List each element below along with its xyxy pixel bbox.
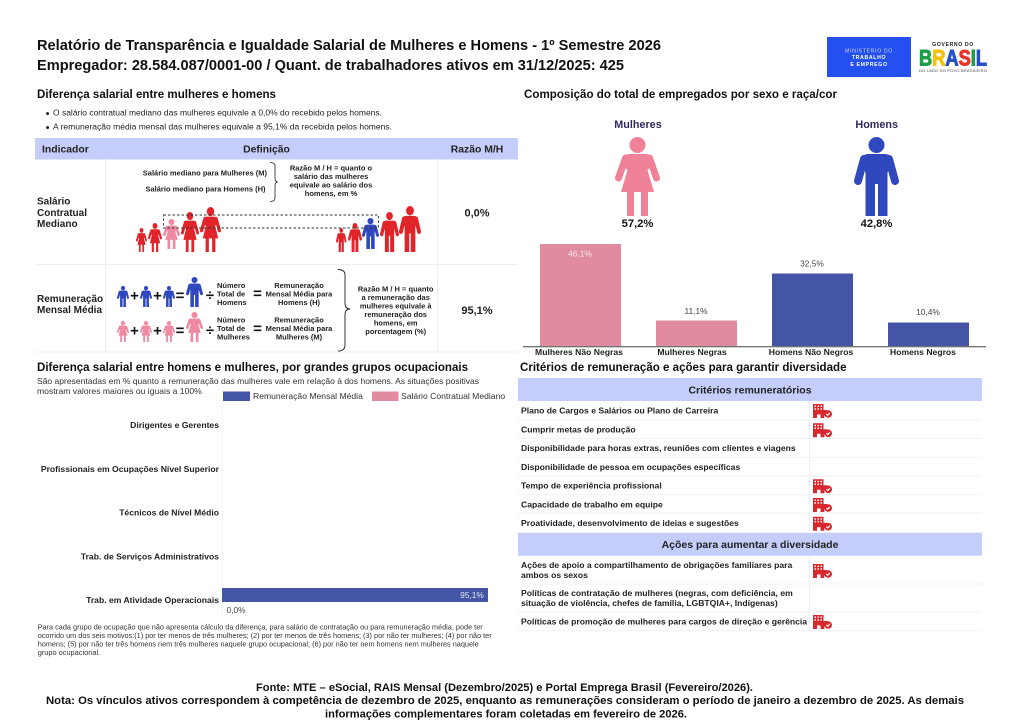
table header: Indicador bbox=[42, 144, 89, 156]
definition labels: salário das mulheres bbox=[294, 172, 368, 181]
heading: critérios: Critérios de remuneração e ações para garantir diversidade bbox=[520, 360, 847, 374]
ratio explanation: Razão M / H = quanto bbox=[358, 284, 434, 294]
icons: actions adopted bbox=[813, 564, 832, 629]
heading: composição: Composição do total de empregados por sexo e raça/cor bbox=[524, 87, 837, 101]
definition labels: Salário mediano para Homens (H) bbox=[145, 185, 266, 194]
action rows: Políticas de promoção de mulheres para cargos de direção e gerência bbox=[521, 616, 807, 626]
formula: women: Mulheres bbox=[217, 332, 250, 342]
indicator name: Mensal Média bbox=[37, 305, 102, 316]
formula: women: Número bbox=[217, 316, 246, 324]
formula: women: Remuneração bbox=[274, 316, 324, 324]
title: Relatório de Transparência e Igualdade Salarial de Mulheres e Homens - 1º Semestre 2026 bbox=[37, 38, 661, 54]
value: 95,1% bbox=[461, 305, 493, 317]
formula: men: + bbox=[130, 288, 139, 304]
legend: Salário Contratual Mediano bbox=[401, 391, 505, 401]
formula: women: Mulheres (M) bbox=[276, 332, 323, 342]
criteria rows: Tempo de experiência profissional bbox=[521, 480, 662, 490]
footer: source and note: informações complementares foram coletadas em fevereiro de 2026. bbox=[325, 708, 687, 720]
footnote bbox=[38, 622, 492, 657]
criteria rows: Plano de Cargos e Salários ou Plano de Carreira bbox=[521, 406, 718, 416]
formula: men bbox=[118, 277, 333, 307]
formula: women: = bbox=[253, 320, 262, 338]
median dashed box bbox=[164, 215, 378, 228]
ratio explanation: remuneração dos bbox=[364, 310, 427, 319]
formula: men: Homens (H) bbox=[278, 298, 321, 307]
icons: criteria adopted bbox=[813, 404, 832, 531]
icon: woman bbox=[618, 137, 656, 216]
formula: women: Mensal Média para bbox=[266, 324, 333, 333]
bullet list: A remuneração média mensal das mulheres equivale a 95,1% da recebida pelos homens. bbox=[53, 122, 392, 132]
formula: women: Total de bbox=[217, 324, 245, 333]
bullet list: ● bbox=[46, 124, 50, 132]
table header bbox=[35, 138, 518, 160]
bar chart: sexo e raça: Homens Negros bbox=[890, 347, 956, 357]
panel: men share: Homens bbox=[855, 119, 898, 131]
bar chart: grupos ocupacionais: 95,1% bbox=[460, 590, 484, 600]
ratio explanation: homens, em bbox=[374, 318, 418, 328]
bar chart: grupos ocupacionais: Técnicos de Nível Médio bbox=[119, 508, 219, 518]
action rows: ambos os sexos bbox=[521, 570, 588, 580]
bar chart: grupos ocupacionais bbox=[41, 407, 488, 616]
header: critérios remuneratórios: Critérios remuneratórios bbox=[688, 384, 812, 396]
panel: criteria table bbox=[518, 378, 982, 631]
criteria rows: Capacidade de trabalho em equipe bbox=[521, 500, 663, 510]
bar chart: sexo e raça: 10,4% bbox=[916, 307, 940, 317]
bar chart: grupos ocupacionais: 0,0% bbox=[226, 605, 246, 615]
formula: women: = bbox=[176, 322, 185, 340]
subtitle text: mostram valores maiores ou iguais a 100% bbox=[37, 386, 202, 396]
logo: Governo do Brasil: GOVERNO DO bbox=[932, 42, 974, 48]
row: salário contratual mediano bbox=[37, 162, 490, 252]
icons: men in order of salary bbox=[337, 206, 419, 252]
panel: women share bbox=[614, 119, 662, 230]
row: remuneração mensal média bbox=[37, 270, 493, 351]
bar chart: grupos ocupacionais: Profissionais em Ocupações Nível Superior bbox=[41, 464, 220, 474]
formula: men: = bbox=[253, 286, 262, 302]
definition labels: homens, em % bbox=[305, 189, 358, 198]
icon: man bbox=[858, 137, 895, 216]
header: ações bbox=[518, 533, 982, 556]
logo: Ministério do Trabalho e Emprego: E EMPREGO bbox=[850, 62, 888, 68]
indicator name: Contratual bbox=[37, 208, 87, 219]
footnote: Para cada grupo de ocupação que não apresenta cálculo da diferença, para salário de contratação ou para remuneração média, pode ter bbox=[38, 622, 483, 632]
formula: men: ÷ bbox=[206, 287, 214, 304]
criteria rows: Proatividade, desenvolvimento de ideias e sugestões bbox=[521, 518, 739, 528]
header: critérios remuneratórios bbox=[518, 378, 982, 401]
heading: diferença salarial: Diferença salarial entre mulheres e homens bbox=[37, 87, 276, 101]
value: 0,0% bbox=[464, 208, 490, 220]
logo: Ministério do Trabalho e Emprego bbox=[827, 37, 911, 77]
formula: women: + bbox=[153, 322, 162, 340]
bar chart: sexo e raça: 32,5% bbox=[800, 258, 824, 268]
subtitle text bbox=[37, 376, 479, 396]
formula: men: + bbox=[153, 288, 162, 304]
action rows: Ações de apoio a compartilhamento de obrigações familiares para bbox=[521, 560, 792, 570]
footer: source and note: Fonte: MTE – eSocial, RAIS Mensal (Dezembro/2025) e Portal Emprega Brasil (Fevereiro/2026). bbox=[256, 682, 753, 694]
logo: Governo do Brasil: BRASIL bbox=[919, 46, 987, 70]
bar chart: grupos ocupacionais: Dirigentes e Gerentes bbox=[130, 420, 219, 430]
header: ações: Ações para aumentar a diversidade bbox=[662, 539, 839, 551]
criteria rows: Disponibilidade para horas extras, reuniões com clientes e viagens bbox=[521, 443, 796, 453]
title: Empregador: 28.584.087/0001-00 / Quant. de trabalhadores ativos em 31/12/2025: 425 bbox=[37, 58, 624, 74]
panel: women share: Mulheres bbox=[614, 119, 662, 131]
indicator name: Salário bbox=[37, 196, 70, 208]
formula: women: ÷ bbox=[206, 322, 214, 339]
formula: men: Número bbox=[217, 281, 246, 290]
definition labels: Razão M / H = quanto o bbox=[290, 163, 373, 172]
bar chart: grupos ocupacionais: Trab. em Atividade Operacionais bbox=[86, 595, 219, 605]
panel: women share: 57,2% bbox=[622, 218, 653, 230]
legend: Remuneração Mensal Média bbox=[253, 391, 363, 401]
panel: indicator table bbox=[35, 138, 518, 352]
action rows: situação de violência, chefes de família, LGBTQIA+, Indígenas) bbox=[521, 598, 778, 608]
footnote: homens; (5) por não ter três homens nem três mulheres naquele grupo ocupacional; (6) por não ter nem homens nem mulheres naquele bbox=[38, 640, 479, 648]
footer: source and note bbox=[46, 682, 964, 720]
bar chart: sexo e raça: Mulheres Não Negras bbox=[535, 347, 623, 357]
panel: men share: 42,8% bbox=[861, 218, 892, 230]
footnote: ocorrido um dos seis motivos:(1) por ter menos de três mulheres; (2) por ter menos de três homens; (3) por não ter mulheres; (4) por não ter bbox=[38, 631, 492, 640]
table header: Definição bbox=[243, 144, 290, 156]
formula: men: Total de bbox=[217, 289, 245, 298]
ratio explanation: a remuneração das bbox=[362, 293, 430, 302]
action rows bbox=[521, 560, 807, 626]
criteria rows: Disponibilidade de pessoa em ocupações específicas bbox=[521, 462, 740, 472]
ratio explanation: porcentagem (%) bbox=[365, 327, 427, 336]
formula: men: = bbox=[176, 288, 185, 304]
ratio explanation: mulheres equivale à bbox=[360, 302, 432, 310]
bullet list: ● bbox=[46, 110, 50, 118]
logo: Governo do Brasil: DO LADO DO POVO BRASILEIRO bbox=[919, 68, 987, 73]
bar chart: sexo e raça: Mulheres Negras bbox=[657, 347, 727, 357]
definition labels bbox=[143, 162, 373, 202]
bar chart: sexo e raça: Homens Não Negros bbox=[769, 347, 853, 357]
criteria rows: Cumprir metas de produção bbox=[521, 424, 636, 434]
heading: grupos ocupacionais: Diferença salarial entre homens e mulheres, por grandes grupos ocupacionais bbox=[37, 360, 468, 374]
definition labels: Salário mediano para Mulheres (M) bbox=[143, 168, 267, 177]
formula: men: Remuneração bbox=[274, 281, 324, 290]
bar chart: grupos ocupacionais: Trab. de Serviços Administrativos bbox=[81, 552, 219, 562]
action rows: Políticas de contratação de mulheres (negras, com deficiência, em bbox=[521, 588, 793, 598]
icons: women in order of salary bbox=[137, 207, 219, 252]
panel: men share bbox=[855, 119, 898, 230]
bullet list bbox=[46, 108, 392, 132]
formula: women bbox=[118, 312, 333, 342]
subtitle text: São apresentadas em % quanto a remuneração das mulheres vale em relação à dos homens. As situações positivas bbox=[37, 376, 479, 386]
footnote: grupo ocupacional. bbox=[38, 648, 100, 657]
legend bbox=[223, 391, 505, 401]
formula: men: Homens bbox=[217, 298, 247, 307]
bullet list: O salário contratual mediano das mulheres equivale a 0,0% do recebido pelos homens. bbox=[53, 108, 382, 118]
formula: men: Mensal Média para bbox=[266, 289, 333, 298]
table header: Razão M/H bbox=[451, 144, 503, 156]
bar chart: sexo e raça: 46,1% bbox=[568, 248, 592, 258]
bar chart: sexo e raça: 11,1% bbox=[684, 306, 708, 316]
logo: Ministério do Trabalho e Emprego: TRABALHO bbox=[852, 55, 886, 61]
indicator name: Mediano bbox=[37, 219, 78, 230]
indicator name: Remuneração bbox=[37, 294, 103, 305]
bar chart: sexo e raça bbox=[523, 244, 986, 357]
definition labels: equivale ao salário dos bbox=[290, 180, 372, 189]
footer: source and note: Nota: Os vínculos ativos correspondem à competência de dezembro de 2025, enquanto as remunerações consideram o período de janeiro a dezembro de 2025. As demais bbox=[46, 695, 964, 707]
logo: Ministério do Trabalho e Emprego: MINISTÉRIO DO bbox=[845, 48, 893, 54]
formula: women: + bbox=[130, 322, 139, 340]
title bbox=[37, 38, 661, 74]
criteria rows bbox=[521, 406, 796, 528]
